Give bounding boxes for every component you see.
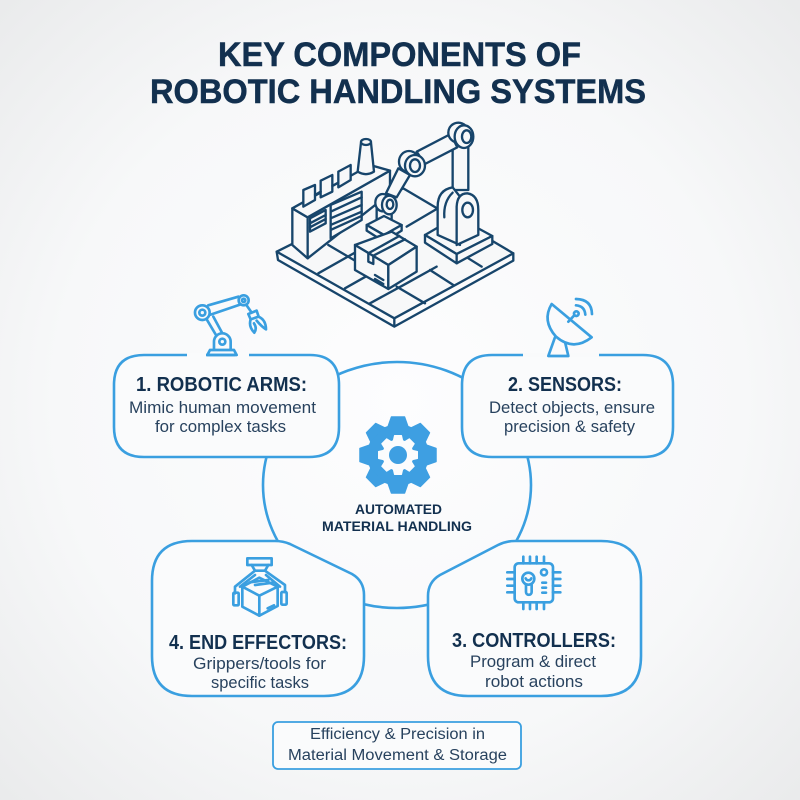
icon: satellite dish [548,299,592,356]
center label: MATERIAL HANDLING [322,518,472,534]
card top gap [523,353,599,357]
cardboard box [355,232,417,289]
title [150,36,646,111]
card body: Grippers/tools for [193,654,326,673]
card: controllers [428,541,641,696]
footer callout [273,722,521,769]
card body: Program & direct [470,652,596,671]
card body: for complex tasks [155,417,286,436]
center label: AUTOMATED [355,501,442,517]
card top gap [187,353,249,357]
icon: central gear [360,417,436,493]
illustration: isometric robotic factory [277,123,513,327]
title: KEY COMPONENTS OF [218,36,581,74]
card body: specific tasks [211,673,309,692]
card body: robot actions [485,672,583,691]
card body [489,398,655,436]
icon: controller chip [507,557,560,609]
center label [322,501,472,534]
icon: robot arm [195,295,266,355]
card: sensors [462,355,673,457]
card heading: 1. ROBOTIC ARMS: [136,374,307,396]
robot arm [367,123,492,263]
center ring connecting cards [263,362,531,608]
factory building [292,139,390,258]
card body [129,398,316,436]
title: ROBOTIC HANDLING SYSTEMS [150,73,646,111]
icon: gripper holding box [233,558,287,616]
card body: Detect objects, ensure [489,398,655,417]
platform [277,188,513,327]
card heading: 3. CONTROLLERS: [452,630,616,652]
footer callout: Efficiency & Precision in [310,726,485,743]
card: robotic arms [114,355,339,457]
card body: Mimic human movement [129,398,316,417]
card body [193,654,326,692]
card heading: 2. SENSORS: [508,374,622,396]
card heading: 4. END EFFECTORS: [169,632,347,654]
card body: precision & safety [504,417,635,436]
card body [470,652,596,691]
footer callout: Material Movement & Storage [288,747,507,764]
card: end effectors [152,541,364,696]
